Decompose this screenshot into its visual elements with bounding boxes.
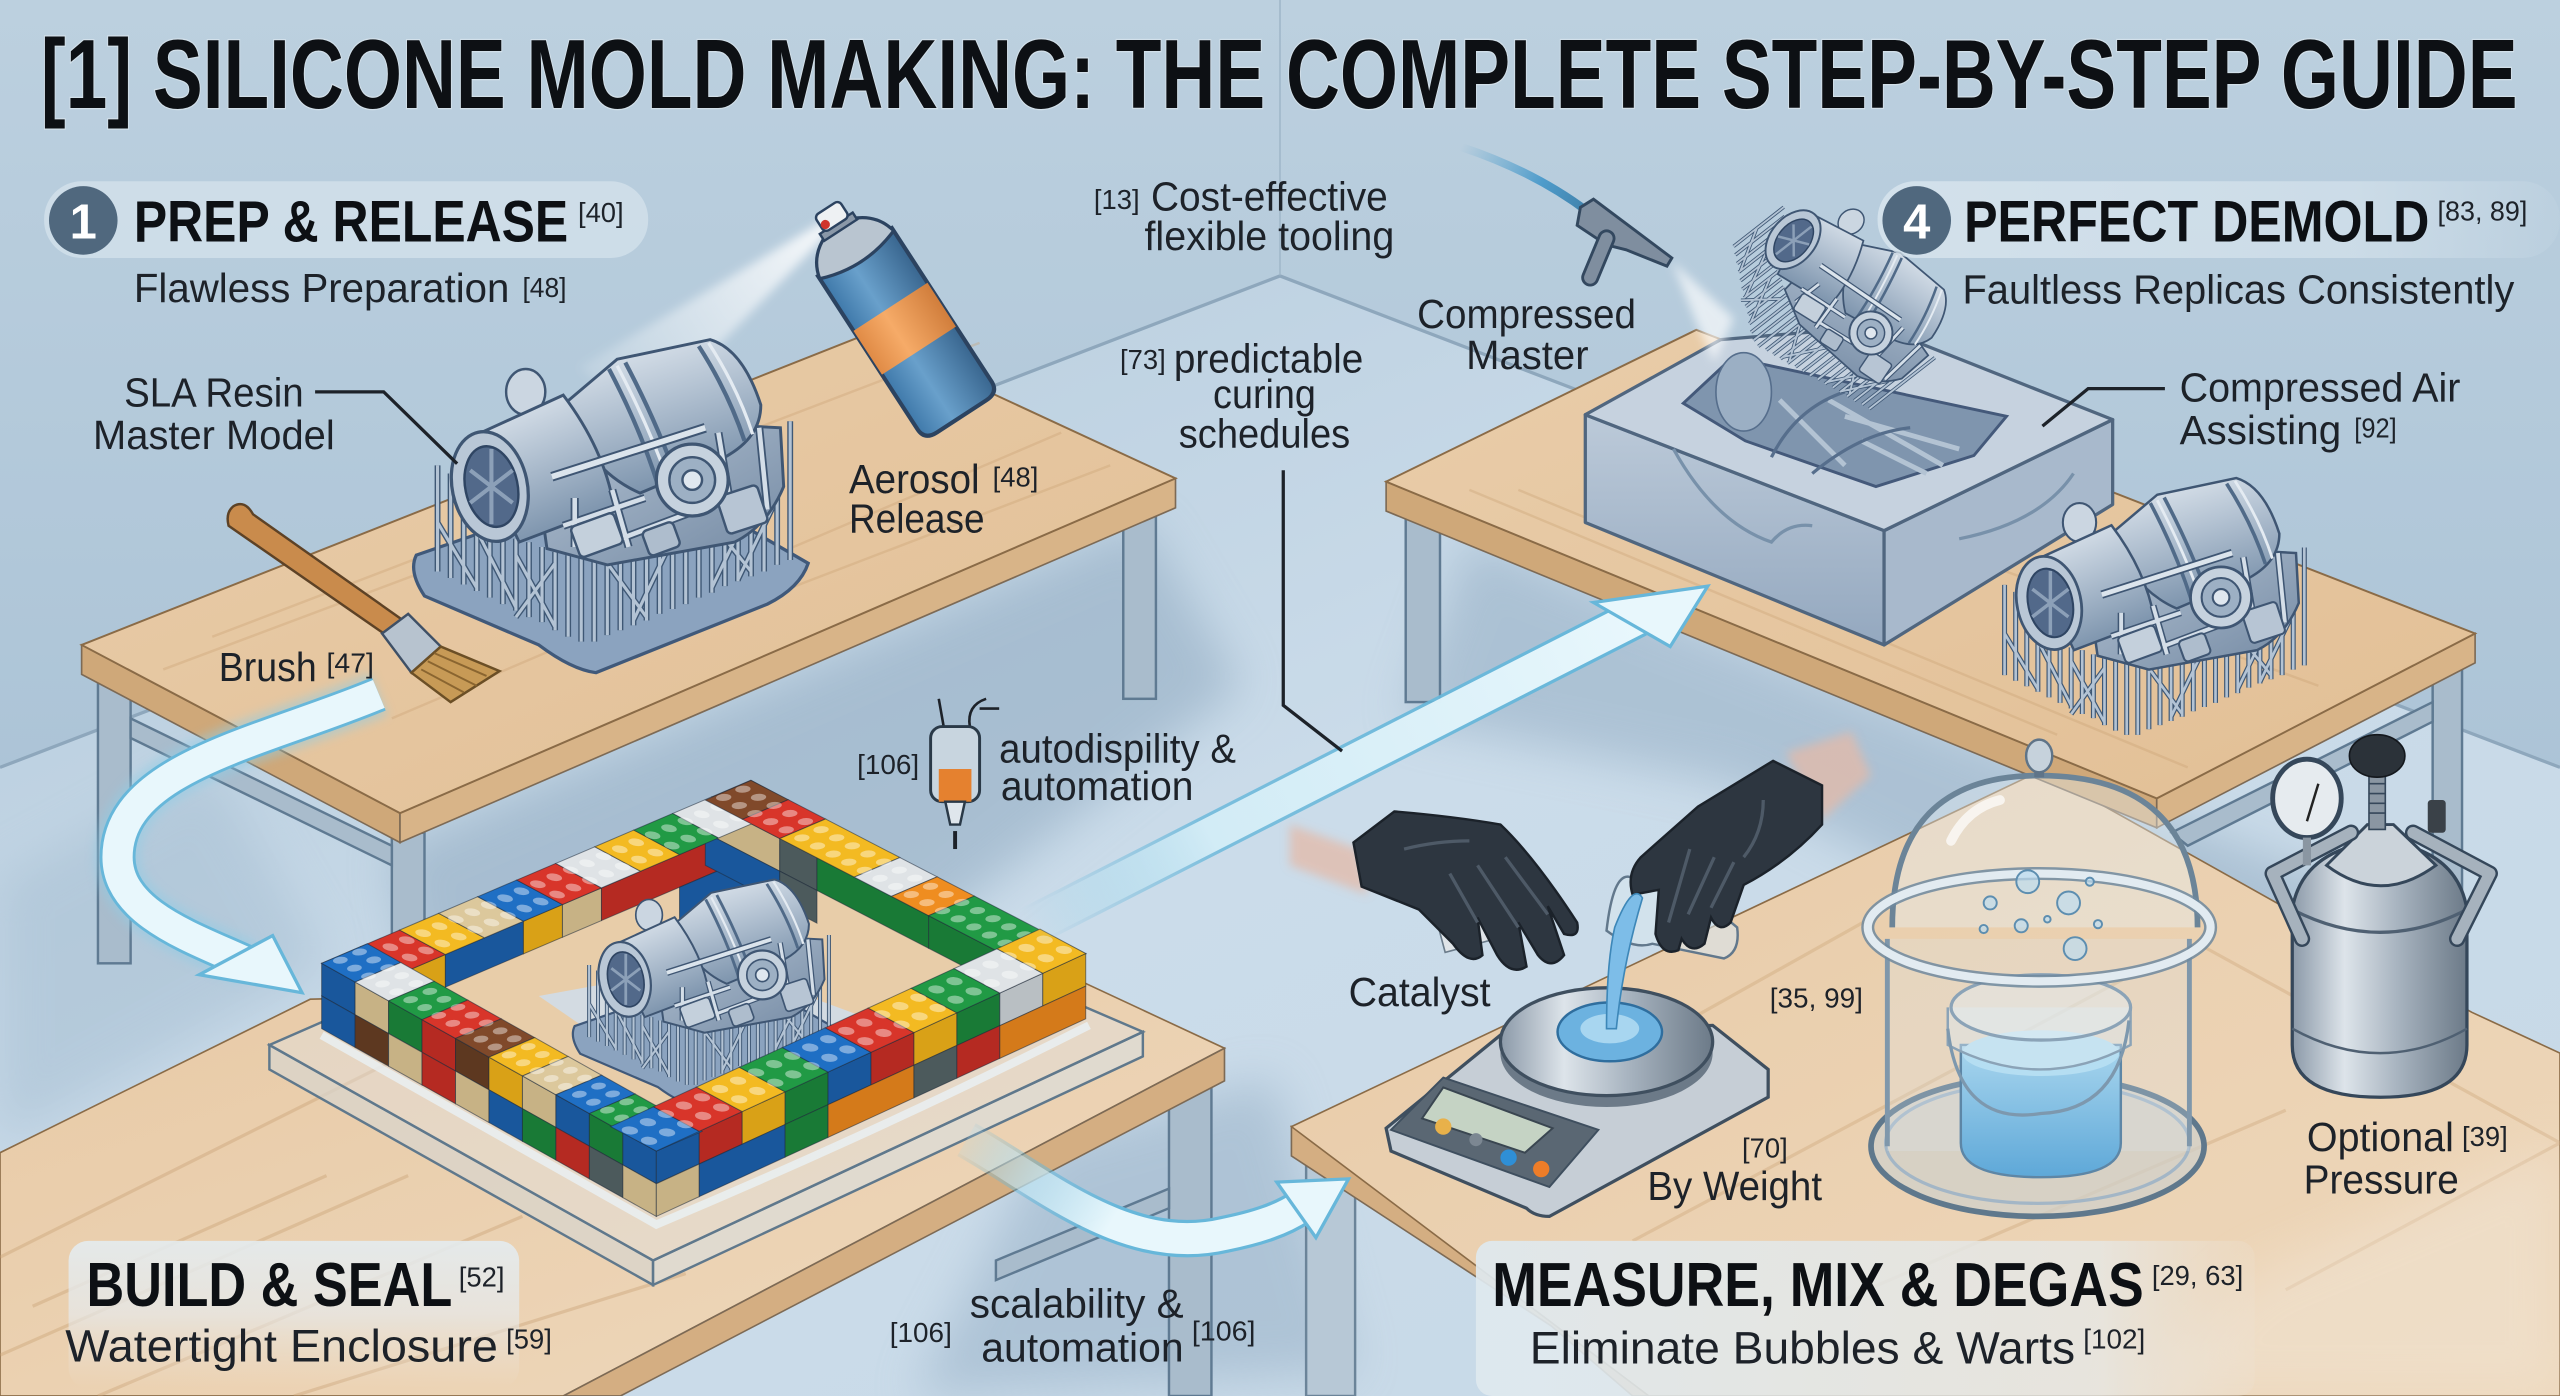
label: by weight — [1647, 1133, 1823, 1209]
table: step 2 tabletop — [0, 980, 1224, 1396]
text: step 4 subtitle: Faultless Replicas Consistently — [1962, 267, 2515, 313]
enclosure front walls outer faces — [322, 954, 1086, 1216]
text: cost-effective tooling: Cost-effective — [1151, 174, 1388, 220]
label: SLA resin master model: Master Model — [93, 412, 335, 458]
label: autodispility and automation: [106] — [857, 749, 919, 780]
label: aerosol release: [48] — [993, 462, 1038, 493]
icon: vacuum chamber — [1868, 740, 2211, 1216]
icon: pouring stream — [1607, 894, 1642, 1029]
text: step 1 subtitle: [48] — [522, 272, 567, 303]
icon: aerosol spray mist — [580, 220, 833, 421]
text: scalability and automation: [106] — [890, 1317, 952, 1348]
enclosure floor and inner faces — [367, 800, 1045, 1127]
panel: step 3 caption — [1476, 1241, 2255, 1396]
label: compressed master — [1417, 291, 1636, 378]
enclosure front walls tops — [322, 929, 1086, 1151]
label: autodispility and automation: automation — [1001, 763, 1193, 809]
icon: silicone mold block — [1585, 327, 2113, 645]
icon: aerosol can — [790, 184, 999, 440]
panel: step 4 heading: PERFECT DEMOLD — [1964, 190, 2429, 255]
label: compressed master: Master — [1466, 332, 1589, 378]
label: compressed air assisting: Assisting — [2180, 407, 2341, 453]
icon: right gloved hand — [1607, 731, 1871, 958]
icon: master model on build plate — [414, 340, 808, 673]
text: predictable curing schedules — [1120, 335, 1363, 751]
table legs: step 3 table — [1306, 1151, 1355, 1396]
text: predictable curing schedules: curing — [1213, 371, 1316, 417]
text: cost-effective tooling: flexible tooling — [1144, 213, 1394, 259]
panel: acrylic base plate with sealant — [269, 849, 1143, 1285]
panel: step 4 heading — [1878, 181, 2560, 258]
label: SLA resin master model: SLA Resin — [124, 370, 304, 416]
panel: step 2 caption — [65, 1241, 552, 1388]
text: scalability and automation: scalability & — [970, 1281, 1184, 1327]
label: optional pressure: [39] — [2462, 1121, 2508, 1152]
panel: step 1 heading: PREP & RELEASE — [134, 190, 568, 255]
icon: paint brush — [228, 504, 500, 702]
panel: step 3 caption: Eliminate Bubbles & Warts — [1530, 1322, 2075, 1373]
label: by weight: [70] — [1742, 1133, 1788, 1164]
icon: master model being lifted out — [1700, 161, 1973, 439]
text: step 1 subtitle: Flawless Preparation — [134, 265, 509, 311]
table: step 1 tabletop — [82, 335, 1176, 842]
text: cost-effective tooling — [1094, 174, 1394, 259]
table: step 3 tabletop — [1291, 771, 2560, 1396]
text: scalability and automation — [890, 1281, 1256, 1371]
label: catalyst: Catalyst — [1349, 969, 1491, 1015]
text: predictable curing schedules: schedules — [1179, 410, 1350, 456]
label: optional pressure — [2304, 1114, 2508, 1203]
label: brush — [219, 644, 374, 690]
panel: step 3 caption: [102] — [2083, 1324, 2145, 1355]
icon: step number 4: 4 — [1903, 195, 1930, 249]
enclosure back walls tops — [322, 780, 1086, 988]
panel: step 1 heading: [40] — [578, 197, 624, 228]
panel: step 3 caption: MEASURE, MIX & DEGAS — [1492, 1251, 2144, 1320]
LEGO enclosure — [322, 780, 1086, 1216]
panel: step 2 caption: [59] — [506, 1324, 552, 1355]
panel: step 3 caption: [29, 63] — [2152, 1260, 2243, 1291]
label: aerosol release: Aerosol — [849, 456, 980, 502]
text: scalability and automation: automation — [981, 1325, 1184, 1371]
panel: step 2 caption: [52] — [459, 1262, 504, 1293]
icon: left gloved hand — [1290, 811, 1578, 970]
label: brush: Brush — [219, 644, 317, 690]
label: compressed master: Compressed — [1417, 291, 1636, 337]
arrow: step 2 to step 4 — [1029, 586, 1708, 927]
arrow: step 1 to step 2 — [118, 694, 379, 993]
icon: compressed air gun — [1461, 147, 1672, 278]
label: autodispility and automation — [857, 725, 1236, 809]
label: optional pressure: Optional — [2307, 1114, 2454, 1160]
icon: step number 1: 1 — [70, 195, 97, 249]
label: SLA resin master model — [93, 370, 457, 464]
icon: step number 4 — [1882, 186, 1951, 255]
text: predictable curing schedules: predictable — [1174, 335, 1363, 381]
table legs: step 2 table — [996, 1086, 1211, 1396]
text: scalability and automation: [106] — [1192, 1315, 1256, 1346]
icon: master model inside enclosure — [573, 879, 841, 1106]
label: compressed air assisting: Compressed Air — [2180, 365, 2460, 411]
citation: vacuum chamber: [35, 99] — [1770, 982, 1863, 1013]
icon: digital scale — [1386, 988, 1768, 1216]
text: predictable curing schedules: [73] — [1120, 344, 1166, 375]
label: optional pressure: Pressure — [2304, 1157, 2459, 1203]
label: aerosol release: Release — [849, 495, 984, 541]
icon: step number 1 — [49, 186, 118, 255]
label: compressed air assisting: [92] — [2354, 413, 2397, 444]
icon: cured replica — [2005, 478, 2304, 735]
label: brush: [47] — [327, 648, 374, 679]
panel: step 2 caption: Watertight Enclosure — [65, 1321, 498, 1372]
icon: bucket of silicone — [1948, 975, 2131, 1177]
panel: step 2 caption: BUILD & SEAL — [87, 1251, 452, 1320]
table legs: step 4 table — [1406, 514, 2462, 914]
text: cost-effective tooling: [13] — [1094, 184, 1140, 215]
table: step 4 tabletop — [1386, 330, 2475, 828]
icon: pressure pot — [2273, 735, 2490, 1097]
panel: step 4 heading: [83, 89] — [2438, 195, 2527, 226]
icon: dispensing nozzle — [931, 699, 999, 849]
label: by weight: By Weight — [1647, 1163, 1823, 1209]
arrow: step 2 to step 3 — [967, 1140, 1349, 1239]
table legs: step 1 table — [98, 506, 1156, 980]
label: aerosol release — [849, 456, 1038, 541]
label: autodispility and automation: autodispility & — [999, 725, 1236, 771]
label: compressed air assisting — [2042, 365, 2460, 453]
icon: air spray — [1672, 261, 1734, 362]
